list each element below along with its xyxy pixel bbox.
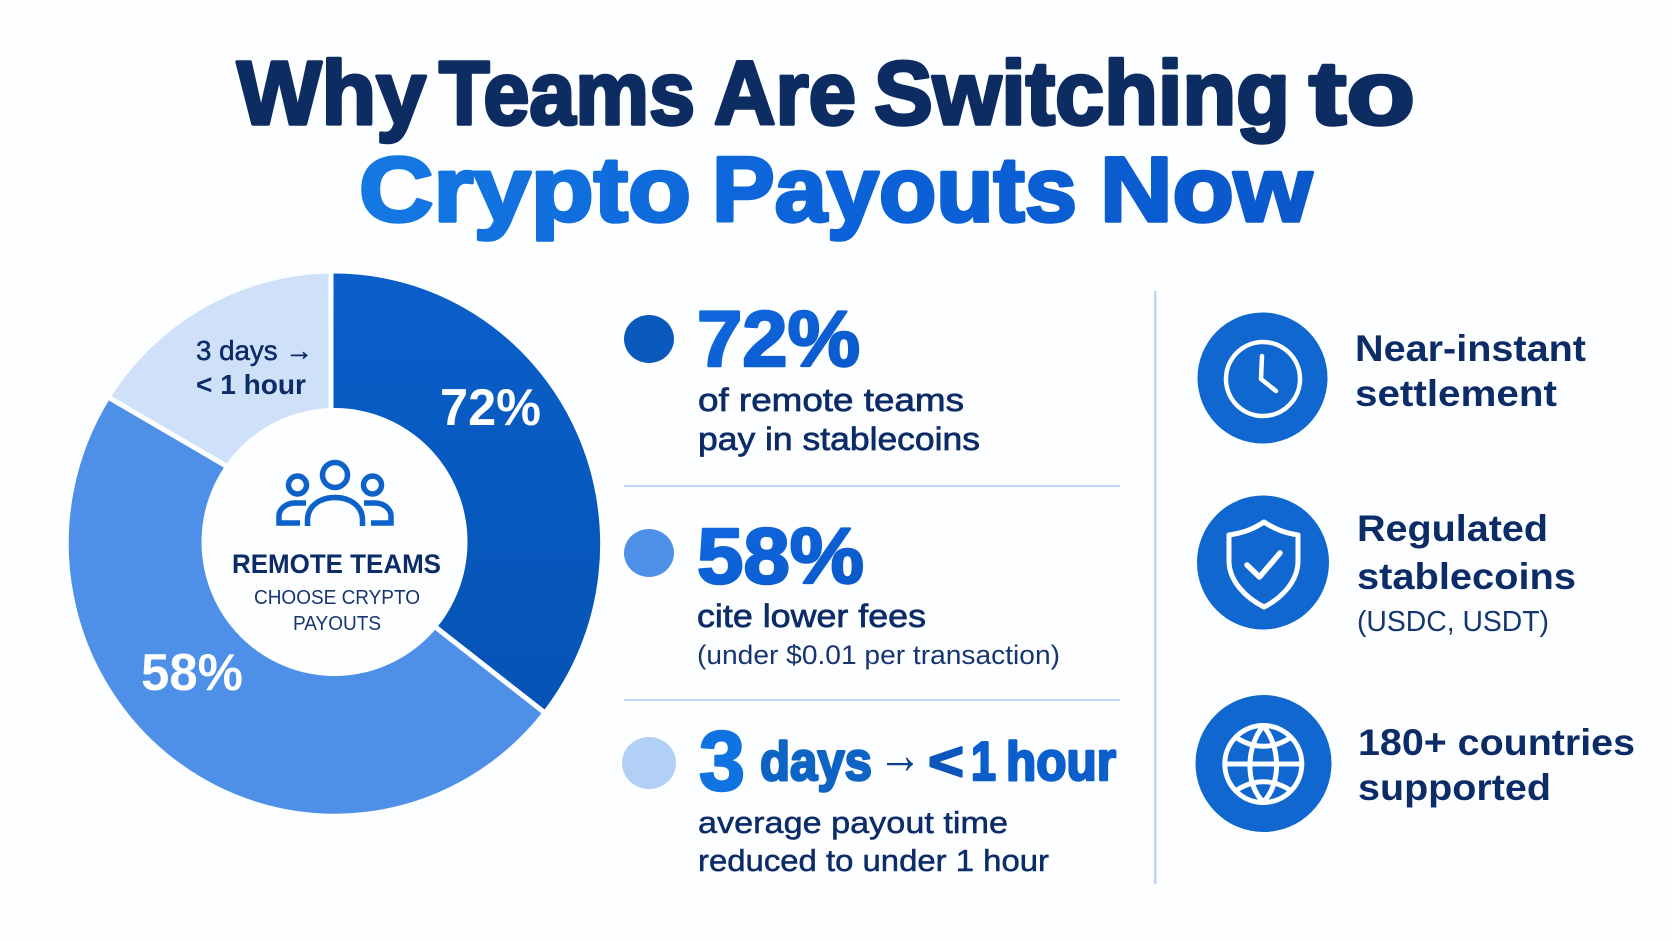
centre disc [202,408,468,676]
bullet light [622,737,676,789]
value 3 days to under 1 hour: hour [1006,730,1116,792]
title line 1 [237,44,1415,144]
title line 2: Payouts [712,139,1077,241]
stat: 72% [624,294,980,457]
stat: 58% [624,511,1060,670]
benefit text [1358,722,1635,808]
note: (under $0.01 per transaction) [697,640,1060,670]
label: 58%: 58% [141,644,243,702]
panel: benefits [1196,312,1635,832]
value 3 days to under 1 hour: days [760,730,872,792]
description [698,382,980,457]
icon: people [279,462,391,526]
bullet dark [624,315,674,363]
label: 3 days: 3 days → [196,335,313,366]
benefit text: Near-instant [1355,328,1586,369]
bullet mid [624,529,674,577]
benefit text: supported [1358,767,1551,808]
panel: statistics [622,294,1120,878]
benefit: countries [1196,695,1635,832]
vertical divider [1154,291,1156,884]
title line 2: Now [1100,139,1312,241]
label: under 1 hour: < 1 hour [196,369,306,400]
centre subtext: PAYOUTS [293,613,381,635]
value 3 days to under 1 hour: → [878,725,922,785]
benefit: settlement [1198,312,1586,444]
value 3 days to under 1 hour: 3 [699,714,745,808]
segment: 72% [331,271,603,713]
donut chart [66,271,603,816]
title line 1: to [1309,44,1415,144]
benefit note: (USDC, USDT) [1357,606,1549,638]
benefit: regulated [1197,496,1576,638]
label: 72%: 72% [440,379,541,437]
divider [624,485,1120,487]
value 3 days to under 1 hour: 1 [971,730,996,792]
centre heading: REMOTE TEAMS [232,549,441,579]
description [698,805,1049,878]
centre subtext: CHOOSE CRYPTO [254,587,420,609]
stat: payout time [622,714,1116,878]
value 58%: 58% [697,511,864,600]
value 72%: 72% [697,294,860,383]
value 3 days to under 1 hour: < [928,730,964,792]
title line 2: Crypto [359,139,691,241]
title line 1: Teams [439,44,695,144]
title [237,44,1415,241]
title line 2 [359,139,1312,241]
benefit text: Regulated [1357,508,1548,549]
benefit text: 180+ countries [1358,722,1635,763]
title line 1: Switching [874,44,1290,144]
benefit text [1355,328,1586,414]
description: average payout time [698,805,1008,840]
title line 1: Are [714,44,856,144]
icon: globe [1196,695,1332,832]
description: cite lower fees [697,598,926,634]
description: pay in stablecoins [698,421,980,457]
title line 1: Why [237,44,426,144]
divider [624,699,1120,701]
icon: shield [1197,496,1329,630]
segment: 58% [66,397,545,816]
description: reduced to under 1 hour [698,843,1049,878]
benefit text: stablecoins [1357,556,1576,597]
benefit text [1357,508,1576,597]
description: of remote teams [698,382,964,418]
value 3 days to under 1 hour [699,714,1116,808]
benefit text: settlement [1355,373,1557,414]
centre subtext [254,587,420,635]
segment: 3 days to under 1 hour [108,271,331,474]
icon: clock [1198,312,1328,444]
